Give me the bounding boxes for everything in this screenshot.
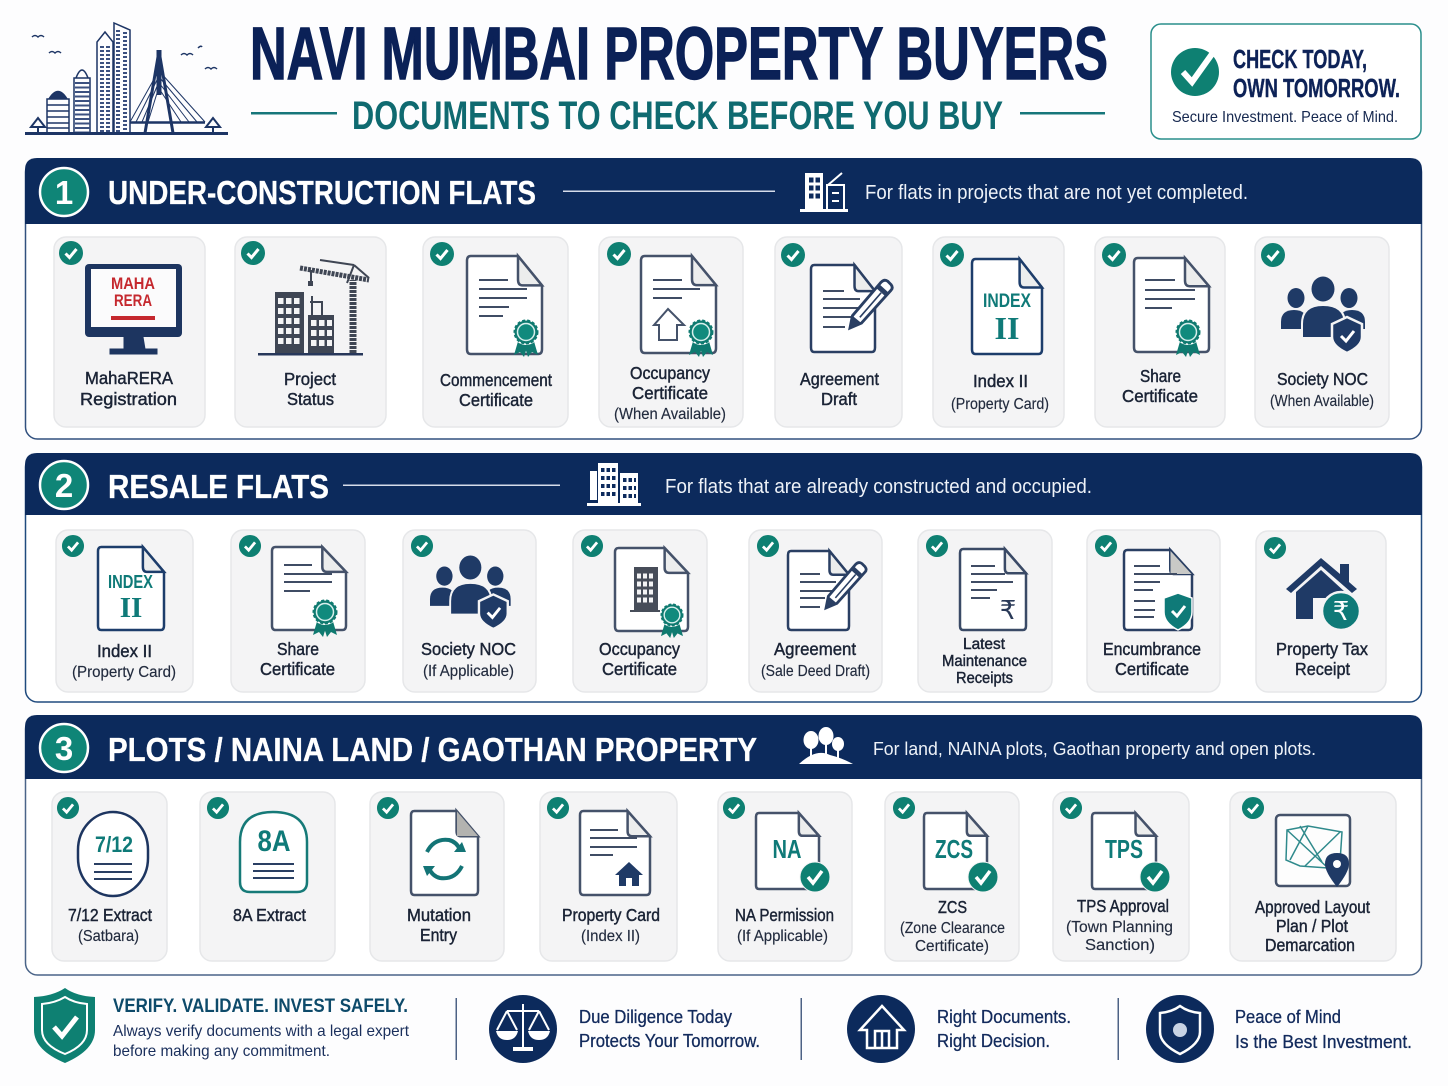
label (1255, 897, 1370, 955)
icon: document with pen (788, 551, 866, 630)
label (1066, 896, 1173, 954)
card: Society NOC (403, 530, 536, 692)
label: Certificate (632, 383, 708, 403)
footer: peace of mind: Peace of Mind (1235, 1007, 1341, 1027)
label: Certificate (459, 390, 533, 410)
section 1 header: UNDER-CONSTRUCTION FLATS (108, 174, 536, 211)
label (900, 897, 1005, 955)
label: Receipts (956, 670, 1013, 687)
icon: people with shield (430, 556, 511, 629)
divider (1118, 998, 1119, 1060)
footer: due diligence: Protects Your Tomorrow. (579, 1031, 760, 1051)
divider (800, 998, 802, 1060)
label (800, 369, 879, 409)
label: Project (284, 369, 336, 389)
label: Share (1140, 366, 1181, 386)
section 2 header: For flats that are already constructed and occupied. (665, 476, 1092, 498)
section 3 header (25, 715, 1422, 779)
card: Share Certificate (1095, 237, 1225, 427)
label: Sanction) (1085, 937, 1155, 954)
label: (If Applicable) (423, 663, 514, 680)
icon: index II document: INDEX (108, 572, 153, 592)
footer: right documents: Right Documents. (937, 1007, 1071, 1027)
icon: index II document (972, 259, 1042, 354)
card: Society NOC (1255, 237, 1389, 427)
icon: ZCS document with check: ZCS (935, 834, 973, 864)
section 1 header (25, 158, 1422, 224)
card: Property Tax Receipt (1256, 531, 1386, 692)
footer: peace of mind: Is the Best Investment. (1235, 1032, 1412, 1052)
icon: house (847, 995, 915, 1063)
icon: scales (489, 995, 557, 1063)
section 3 header: 3 (55, 730, 73, 767)
callout: check today: Secure Investment. Peace of Mind. (1172, 109, 1398, 126)
footer: due diligence (489, 995, 760, 1063)
subtitle: DOCUMENTS TO CHECK BEFORE YOU BUY (352, 94, 1003, 138)
label (1103, 639, 1201, 679)
label: Registration (80, 389, 177, 409)
label: Entry (420, 925, 457, 945)
label: Receipt (1295, 659, 1350, 679)
label: (When Available) (1270, 393, 1374, 410)
section 2 header (25, 453, 1422, 515)
card: 8A Extract (200, 792, 335, 961)
icon: NA document with check (756, 813, 830, 892)
label (1276, 639, 1368, 679)
icon: people with shield (1281, 276, 1365, 353)
label: Society NOC (421, 639, 516, 659)
label: Certificate (602, 659, 677, 679)
icon: document with rupee (960, 549, 1026, 630)
icon: 7/12 record: 7/12 (95, 832, 133, 857)
label (1270, 369, 1374, 410)
label (562, 905, 660, 945)
icon: document with rupee: ₹ (1000, 596, 1016, 626)
label: (Property Card) (72, 664, 176, 681)
label (440, 370, 552, 410)
label: Certificate) (915, 938, 989, 955)
card: Encumbrance Certificate (1087, 530, 1220, 692)
label: Certificate (1122, 386, 1198, 406)
card: MahaRERA Registration (54, 237, 205, 427)
label: Encumbrance (1103, 639, 1201, 659)
label (407, 905, 471, 945)
icon: index II document: INDEX (983, 291, 1031, 312)
label (942, 636, 1027, 687)
icon: document with ribbon (467, 256, 542, 357)
label: Latest (963, 636, 1006, 653)
label (80, 368, 177, 409)
card: Mutation Entry (370, 792, 504, 961)
label (72, 641, 176, 681)
label: Occupancy (630, 363, 710, 383)
callout: check today: CHECK TODAY, (1233, 44, 1367, 74)
card: Approved Layout (1230, 792, 1396, 961)
icon: shield badge (1146, 995, 1214, 1063)
card: Share Certificate (231, 530, 365, 692)
skyline logo (25, 23, 228, 134)
label (68, 905, 152, 945)
card: Property Card (540, 792, 677, 961)
card: Occupancy Certificate (573, 530, 707, 692)
callout: check today (1151, 24, 1421, 139)
footer: verify block: Always verify documents with a legal expert (113, 1023, 410, 1040)
label: Certificate (260, 659, 335, 679)
icon: 7/12 record (78, 812, 148, 896)
card: Latest Maintenance Receipts (918, 530, 1052, 692)
icon: shield (34, 988, 95, 1063)
icon: document with house and ribbon (641, 256, 716, 357)
footer: verify block: before making any commitment. (113, 1043, 330, 1060)
section 1 header: For flats in projects that are not yet completed. (865, 182, 1248, 204)
label (421, 639, 516, 680)
label: 8A Extract (233, 905, 306, 925)
divider (456, 998, 457, 1060)
card: NA Permission (718, 792, 852, 961)
card: Index II (933, 237, 1064, 427)
card: Agreement Draft (775, 237, 902, 427)
icon: 8A record (240, 812, 307, 892)
footer: peace of mind (1146, 995, 1412, 1063)
section 3 header: For land, NAINA plots, Gaothan property and open plots. (873, 739, 1316, 759)
label: NA Permission (735, 905, 834, 925)
label: Mutation (407, 905, 471, 925)
label: (Sale Deed Draft) (761, 663, 870, 680)
label (260, 639, 335, 679)
icon: document with ribbon (272, 547, 346, 637)
icon: document with ribbon (1134, 258, 1209, 357)
icon: house with rupee (1286, 558, 1360, 630)
label: Share (277, 639, 319, 659)
icon: house with rupee: ₹ (1333, 597, 1349, 627)
label: Property Tax (1276, 639, 1368, 659)
label: TPS Approval (1077, 896, 1169, 916)
card: Project Status (235, 237, 386, 427)
label: ZCS (938, 897, 967, 917)
section 2 header: RESALE FLATS (108, 468, 329, 505)
label (761, 639, 870, 680)
icon: monitor: RERA (114, 291, 152, 310)
icon: 8A record: 8A (258, 825, 290, 858)
label: Demarcation (1265, 935, 1355, 955)
label: Maintenance (942, 653, 1027, 670)
label: 7/12 Extract (68, 905, 152, 925)
icon: document with shield (1124, 550, 1192, 630)
card: Agreement Sale Deed Draft (749, 530, 882, 692)
footer: due diligence: Due Diligence Today (579, 1007, 732, 1027)
label (735, 905, 834, 945)
label: (When Available) (614, 406, 726, 423)
icon: NA document with check: NA (772, 834, 802, 864)
icon: ZCS document with check (924, 813, 998, 892)
card: Index II (56, 530, 193, 692)
label: Commencement (440, 370, 552, 390)
label: Property Card (562, 905, 660, 925)
label (599, 639, 680, 679)
icon: document with house (580, 811, 650, 895)
label: (Property Card) (951, 396, 1049, 413)
label: Agreement (800, 369, 879, 389)
section 3 header: PLOTS / NAINA LAND / GAOTHAN PROPERTY (108, 731, 757, 768)
icon: document with sync arrows (411, 811, 478, 895)
label: Index II (97, 641, 152, 661)
label: MahaRERA (85, 368, 173, 388)
label: Index II (973, 371, 1028, 391)
card: 7/12 Extract (52, 792, 167, 961)
icon: document with building (615, 548, 688, 638)
label: Certificate (1115, 659, 1189, 679)
footer: right documents (847, 995, 1071, 1063)
icon: monitor: MAHA (111, 274, 155, 293)
label: (Satbara) (78, 928, 139, 945)
label: Agreement (774, 639, 856, 659)
section 2 header: 2 (55, 467, 73, 504)
card: TPS Approval (1053, 792, 1189, 961)
footer: verify block: VERIFY. VALIDATE. INVEST SAFELY. (113, 996, 408, 1017)
label: (If Applicable) (737, 928, 828, 945)
section 1 header: 1 (55, 174, 73, 211)
label: Approved Layout (1255, 897, 1370, 917)
panel: plots naina land gaothan property (25, 715, 1422, 975)
icon: monitor (85, 264, 182, 354)
icon: index II document: II (120, 592, 142, 624)
card: Occupancy Certificate (599, 237, 743, 427)
panel: under-construction flats (25, 158, 1422, 439)
icon: layout plan with pin (1276, 815, 1350, 887)
label: Society NOC (1277, 369, 1368, 389)
label (1122, 366, 1198, 406)
icon: TPS document with check: TPS (1105, 834, 1143, 864)
label: (Index II) (581, 928, 640, 945)
label: Occupancy (599, 639, 680, 659)
card: Commencement Certificate (423, 237, 568, 427)
icon: TPS document with check (1092, 813, 1170, 892)
label: Plan / Plot (1276, 916, 1348, 936)
label: Status (287, 389, 334, 409)
icon: index II document (98, 547, 164, 630)
label (284, 369, 336, 409)
panel: resale flats (25, 453, 1422, 702)
label (951, 371, 1049, 413)
footer: verify block (34, 988, 410, 1063)
card: ZCS (885, 792, 1019, 961)
icon: index II document: II (995, 310, 1019, 346)
icon: document with pen (811, 265, 892, 352)
label (614, 363, 726, 423)
footer: right documents: Right Decision. (937, 1031, 1050, 1051)
label: Draft (821, 389, 857, 409)
label: (Zone Clearance (900, 920, 1005, 937)
icon: building and crane (258, 260, 369, 356)
label: (Town Planning (1066, 919, 1173, 936)
